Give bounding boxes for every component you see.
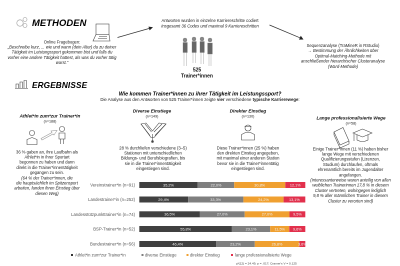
description: weiblichen Trainerinnen 17,8 % in diesem <box>312 183 389 188</box>
row: Landestrainer: 24,2% <box>258 198 269 202</box>
stacked bar chart <box>71 182 307 247</box>
icon: trainer <box>242 125 254 140</box>
arrow: coding to sequence analysis <box>270 25 304 40</box>
panel: athlete to trainer <box>14 114 81 196</box>
row: Landesstützpunkttrainer: 27,0% <box>262 213 273 217</box>
chart legend: Athlet*in zum*zur Trainer*in <box>75 252 126 258</box>
description <box>14 149 80 196</box>
heading: Methoden: METHODEN <box>32 17 87 28</box>
row: Bundestrainer: 26,8% <box>272 242 283 246</box>
title: Athlet*in zum*zur Trainer*in <box>19 114 81 118</box>
row: Landestrainer: Landestrainer*in (n=252) <box>88 197 136 202</box>
icon: results chart <box>15 80 28 88</box>
text: coding <box>161 18 259 28</box>
icon: gears <box>17 18 27 28</box>
description: eingestiegen sind. <box>231 166 265 171</box>
row: Vereinstrainer: Vereinstrainer*in (n=91) <box>90 182 136 188</box>
text: sequence analysis <box>301 43 386 69</box>
row: Vereinstrainer <box>90 182 305 188</box>
chart legend: lange professionalisierte Wege <box>235 252 292 258</box>
row: Landestrainer: 29,4% <box>158 198 170 202</box>
description: Qualifizierungsstufen (Lizenzen, <box>321 157 380 162</box>
row: Bundestrainer: 23,2% <box>230 242 241 246</box>
description: Stationen mit unterschiedlichen <box>124 150 182 156</box>
description: bevor sie in die Trainer*innentätig <box>217 161 279 166</box>
text: online questionnaire: Tätigkeit im Leistungssport gekommen bist und falls du <box>12 50 113 55</box>
title: Direkter Einstieg <box>230 108 266 114</box>
label: 525 trainers: Trainer*innen <box>181 74 213 80</box>
text: sequence analysis: Optimal-Matching-Methode mit <box>315 53 372 58</box>
description <box>119 145 187 171</box>
row: BSP-Trainer: 9,6% <box>293 227 302 231</box>
sample size: (n=58) <box>346 122 356 126</box>
row: BSP-Trainer: 23,1% <box>246 227 257 231</box>
text: online questionnaire: warst.“ <box>56 60 69 65</box>
chart legend: diverse Einstiege <box>145 252 177 258</box>
description: begonnen zu haben und dann <box>19 160 75 165</box>
description: 36 % gaben an, ihre Laufbahn als <box>16 149 78 154</box>
sample size: (n=130) <box>242 115 254 119</box>
chart legend <box>71 252 292 258</box>
description: ehrenamtlich bereits im Jugendalter <box>318 167 384 172</box>
row: Landestrainer <box>88 196 305 202</box>
description: (64 % der Trainer*innen, die <box>21 175 73 180</box>
icon: trainer figures <box>183 37 212 66</box>
label: 525 trainers <box>181 68 213 80</box>
description: eingestiegen sind. <box>136 166 170 171</box>
sample size: (n=188) <box>44 120 56 124</box>
description: Einige Trainer*innen (11 %) haben bisher <box>313 146 389 151</box>
text: coding: Insgesamt 36 Codes und maximal 9 Karriereschritten <box>161 23 259 28</box>
panel: long professional paths <box>310 116 391 203</box>
text: online questionnaire: vorher eine andere Tätigkeit hattest, als was du vorher tätig <box>8 55 117 60</box>
description: sie in die Trainer*innentätigkeit <box>125 161 182 166</box>
description: 28 % durchliefen verschiedene (3–5) <box>119 145 187 150</box>
icon: book and graduation cap <box>334 128 372 148</box>
row: BSP-Trainer: 55,8% <box>180 227 192 231</box>
row: Landesstützpunkttrainer: 36,5% <box>164 213 176 217</box>
row: Landesstützpunkttrainer: Landesstützpunkttrainer*in (n=74) <box>71 212 136 217</box>
sample size: (n=149) <box>146 115 158 119</box>
panel: diverse entries <box>119 108 187 171</box>
description: arbeiten, fanden ihren Einstieg über <box>14 186 80 191</box>
text: online questionnaire: „Beschreibe kurz, ... wie und wann (dein Alter) du zu deiner <box>7 44 117 49</box>
description: Cluster zu verorten sind) <box>328 198 374 203</box>
description: (Interessanterweise waren anteilig von allen <box>310 178 391 182</box>
description: 9,8 % aller männlichen Trainer in diesem <box>313 193 388 198</box>
chart legend: direkter Einstieg <box>190 252 220 258</box>
row: Vereinstrainer: 22,0% <box>211 183 222 187</box>
text: sequence analysis: (Ward-Methode) <box>328 64 359 69</box>
description <box>217 145 280 171</box>
row: Landestrainer: 13,1% <box>289 198 300 202</box>
description: Cluster vertreten, wohingegen lediglich <box>315 188 387 193</box>
row: Bundestrainer <box>90 241 307 247</box>
subheading: analysis: Die Analyse aus den Antworten von 525 Trainer*innen zeigte vier verschiedene typische Karrierewege: <box>100 97 300 102</box>
text: coding: Antworten wurden in einzelne Karriereschritte codiert <box>161 18 259 23</box>
row: Vereinstrainer: 12,1% <box>290 183 301 187</box>
description: Diese Trainer*innen (25 %) haben <box>217 145 280 150</box>
statistics note: χ²(12) = 24.49, p = .017; Cramer's V = 0.125 <box>236 262 297 266</box>
description: mit maximal einer anderen Station <box>217 156 280 161</box>
arrow: questionnaire to coding <box>118 27 153 38</box>
description: gegangen zu sein. <box>30 170 64 175</box>
description: Bildungs- und Berufsbiografien, bis <box>121 156 185 161</box>
title: Diverse Einstiege <box>133 108 172 114</box>
row: Landesstützpunkttrainer: 9,5% <box>293 213 302 217</box>
text: sequence analysis: Sequenzanalyse (TraMineR in RStudio) <box>307 43 380 48</box>
icon: branching paths <box>141 123 166 142</box>
row: Vereinstrainer: 30,8% <box>254 183 266 187</box>
description: direkt in die Trainer*innentätigkeit <box>16 165 78 170</box>
title: Lange professionalisierte Wege <box>316 116 386 120</box>
text: online questionnaire: Online Fragebogen: <box>44 39 80 44</box>
text: sequence analysis: anschließender hierarchischer Clusteranalyse <box>301 58 386 64</box>
row: BSP-Trainer: 11,5% <box>274 227 286 231</box>
heading: Ergebnisse: ERGEBNISSE <box>32 81 88 90</box>
description: die hauptsächlich im Spitzensport <box>16 180 79 186</box>
label: 525 trainers: 525 <box>193 68 201 74</box>
row: Bundestrainer: 3,6% <box>298 242 307 246</box>
row: Vereinstrainer: 35,2% <box>163 183 174 187</box>
icon: athlete to trainer <box>27 126 65 144</box>
row: BSP-Trainer <box>93 226 305 232</box>
row: Landesstützpunkttrainer <box>71 211 305 217</box>
description: diesen Weg) <box>35 191 59 196</box>
description: angefangen. <box>339 172 362 177</box>
text: online questionnaire <box>7 39 117 65</box>
row: Bundestrainer: 46,4% <box>172 242 184 246</box>
description: Studium) durchlaufen, oftmals <box>323 162 378 167</box>
description: lange Wege mit verschiedenen <box>322 152 380 156</box>
row: BSP-Trainer: BSP-Trainer*in (n=52) <box>93 227 136 232</box>
row: Landesstützpunkttrainer: 27,0% <box>217 213 228 217</box>
icon: laptop <box>93 24 110 41</box>
row: Landestrainer: 33,3% <box>210 198 222 202</box>
row: Bundestrainer: Bundestrainer*in (n=56) <box>90 242 136 246</box>
description: den direkten Einstieg angegeben, <box>217 150 279 156</box>
panel: direct entry <box>217 108 280 171</box>
description: Athlet*in in ihrer Sportart <box>24 154 70 160</box>
text: sequence analysis: → Bestimmung der Ähnlichkeiten über <box>308 48 379 53</box>
description <box>310 146 391 203</box>
heading: research question: Wie kommen Trainer*innen zu ihrer Tätigkeit im Leistungssport? <box>119 92 282 98</box>
